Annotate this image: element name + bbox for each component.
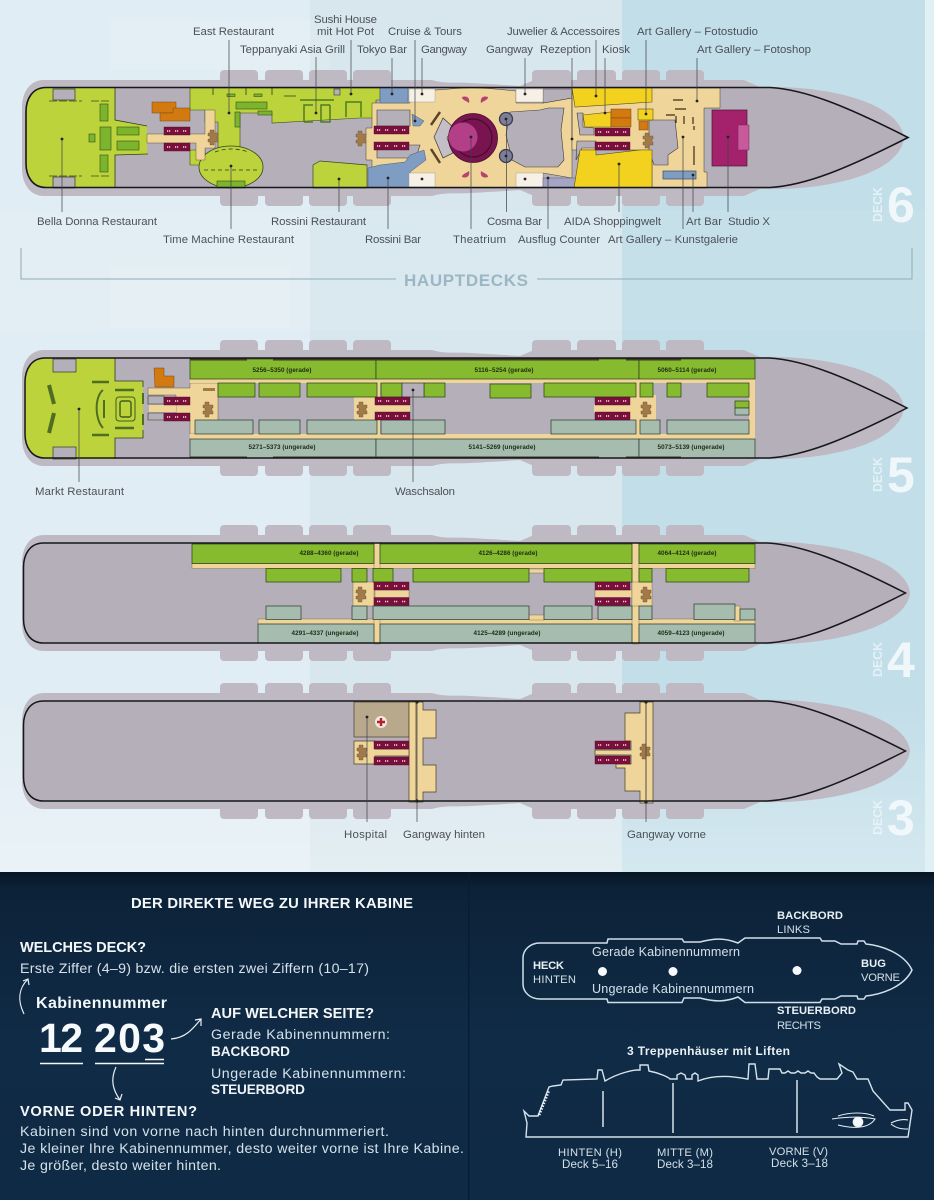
- corridor aft: [147, 110, 215, 160]
- shops yellow: [572, 88, 653, 188]
- hull floor deck 4: [24, 543, 906, 643]
- diagram: ship side view: HINTEN (H): [558, 1147, 622, 1159]
- arrow up to deck text: [20, 979, 29, 1014]
- text block: Vorne oder hinten: Je kleiner Ihre Kabinennummer, desto weiter vorne ist Ihre Kabine.: [20, 1141, 464, 1157]
- cabin number example: [36, 995, 167, 1064]
- page background: [0, 0, 934, 872]
- cabin number example: 12: [39, 1015, 83, 1061]
- odd cabin band bottom deck 4: 4125–4289 (ungerade): [474, 630, 540, 637]
- deck label 5: DECK: [871, 457, 885, 492]
- callout: Art Gallery Kunstgalerie: [608, 136, 738, 246]
- Rossini Restaurant: [313, 161, 367, 188]
- even cabin band top deck 5: [190, 359, 755, 379]
- callout: Sushi House mit Hot Pot: Sushi House: [314, 14, 377, 26]
- callout: Ausflug Counter: [518, 177, 600, 246]
- text block: Auf welcher Seite: [211, 1006, 406, 1097]
- callout: Hospital: Hospital: [344, 829, 387, 841]
- callout: Markt Restaurant: [35, 408, 125, 498]
- callout: Kiosk: Kiosk: [602, 44, 630, 56]
- diagram: ship top view: HINTEN: [533, 974, 576, 986]
- callout: AIDA Shoppingwelt: AIDA Shoppingwelt: [564, 216, 662, 228]
- Hospital room: [354, 702, 409, 737]
- Art Bar: [663, 171, 696, 179]
- hull silhouette shadow deck 5: [22, 340, 904, 476]
- diagram: ship top view: STEUERBORD: [777, 1005, 856, 1017]
- diagram: ship side view: Deck 3–18: [657, 1158, 713, 1171]
- text block: Welches Deck: Erste Ziffer (4–9) bzw. die ersten zwei Ziffern (10–17): [20, 961, 369, 977]
- hull silhouette shadow deck 6: [22, 70, 904, 206]
- inner odd cabins deck 4: [266, 604, 755, 620]
- deck label 4: 4: [887, 632, 915, 688]
- callout: Gangway forward: [486, 44, 533, 180]
- inner odd cabins deck 5: [195, 408, 749, 434]
- callout: East Restaurant: East Restaurant: [193, 26, 275, 38]
- callouts deck 6: [37, 14, 811, 246]
- diagram: ship side view: [524, 1064, 912, 1171]
- inner even cabins deck 5: [218, 383, 749, 408]
- callout: Bella Donna Restaurant: Bella Donna Restaurant: [37, 216, 158, 228]
- text block: Auf welcher Seite: AUF WELCHER SEITE?: [211, 1006, 374, 1022]
- callout: Waschsalon: Waschsalon: [395, 486, 455, 498]
- deck label 3: [871, 790, 915, 846]
- callout: Waschsalon: [395, 389, 455, 498]
- callout: Theatrium: Theatrium: [453, 234, 506, 246]
- text block: Auf welcher Seite: STEUERBORD: [211, 1082, 305, 1097]
- even cabin band top deck 5: 5256–5350 (gerade): [252, 367, 312, 374]
- diagram: ship top view: Gerade Kabinennummern: [592, 945, 740, 959]
- odd cabin band bottom deck 5: 5271–5373 (ungerade): [248, 444, 316, 451]
- panel: navy cabin guide: [0, 872, 934, 1200]
- callout: Time Machine Restaurant: Time Machine Restaurant: [163, 234, 295, 246]
- deck label 6: DECK: [871, 187, 885, 222]
- deck label 4: [871, 632, 915, 688]
- deck label 3: DECK: [871, 800, 885, 835]
- corridors deck 4: [192, 543, 755, 644]
- Markt Restaurant area: [25, 358, 143, 459]
- hull outline deck 4: [24, 543, 906, 643]
- callout: Sushi House mit Hot Pot: [314, 14, 377, 95]
- odd cabin band bottom deck 5: 5141–5269 (ungerade): [468, 444, 536, 451]
- guide title: DER DIREKTE WEG ZU IHRER KABINE: [131, 896, 413, 912]
- callout: Art Gallery Fotostudio: Art Gallery – Fotostudio: [637, 26, 758, 38]
- odd cabin band bottom deck 4: 4291–4337 (ungerade): [292, 630, 358, 637]
- arrow down to position text: [113, 1067, 122, 1100]
- forward beige corridors: [572, 88, 720, 188]
- deck label 3: 3: [887, 790, 915, 846]
- diagram: ship side view: Deck 3–18: [771, 1157, 828, 1170]
- corridors deck 5: [190, 379, 755, 439]
- hull silhouette shadow deck 4: [22, 525, 910, 661]
- callout: Art Gallery Fotoshop: Art Gallery – Fotoshop: [697, 44, 811, 56]
- callout: Rossini Restaurant: [271, 178, 367, 228]
- arrow right to side text: [171, 1019, 201, 1039]
- diagram: ship top view: LINKS: [777, 924, 810, 936]
- callout: Teppanyaki Asia Grill: [240, 44, 345, 114]
- even cabin band top deck 4: [192, 544, 755, 564]
- callout: Gangway vorne: [627, 700, 706, 841]
- hull floor deck 6: [26, 88, 908, 188]
- central atrium floor: [366, 88, 572, 188]
- section heading: Hauptdecks: [21, 248, 912, 290]
- callout: Gangway port aft: [421, 44, 467, 180]
- callout: Studio X: Studio X: [728, 216, 770, 228]
- callout: Tokyo Bar: [357, 44, 407, 95]
- section heading: Hauptdecks: HAUPTDECKS: [404, 271, 528, 290]
- deck label 6: 6: [887, 177, 915, 233]
- callout: Gangway hinten: Gangway hinten: [403, 829, 485, 841]
- hull outline deck 5: [25, 358, 907, 458]
- callout: Art Bar: [686, 174, 722, 228]
- icon: ship eye: [832, 1113, 908, 1129]
- hull outline deck 3: [24, 701, 906, 801]
- diagram: ship top view: HECK: [533, 960, 564, 972]
- atrium service rooms: [377, 89, 572, 167]
- callout: East Restaurant: [193, 26, 275, 114]
- callout: Gangway forward: Gangway: [486, 44, 533, 56]
- diagram: ship side view: VORNE (V): [769, 1146, 828, 1158]
- orange service rooms: [152, 102, 648, 130]
- bars: Tokyo Bar and Rossini Bar: [368, 88, 426, 188]
- odd cabin band bottom deck 5: 5073–5139 (ungerade): [658, 444, 724, 451]
- panel: deck 4 plan: [22, 525, 910, 661]
- callout: Sushi House mit Hot Pot: mit Hot Pot: [317, 26, 375, 38]
- text block: Vorne oder hinten: Kabinen sind von vorne nach hinten durchnummeriert.: [20, 1124, 389, 1140]
- callout: Gangway vorne: Gangway vorne: [627, 829, 706, 841]
- text block: Auf welcher Seite: Ungerade Kabinennummern:: [211, 1066, 406, 1082]
- panel: deck 5 plan: [22, 340, 907, 476]
- Waschsalon room: [402, 383, 424, 397]
- deck label 5: 5: [887, 447, 915, 503]
- callout: Gangway port aft: Gangway: [421, 44, 467, 56]
- deck label 6: [871, 177, 915, 233]
- callout: Rezeption: [540, 44, 591, 140]
- hull outline deck 6: [26, 88, 908, 188]
- callout: Cosma Bar: [487, 118, 542, 228]
- callout: AIDA Shoppingwelt: [564, 163, 662, 228]
- deck label 4: DECK: [871, 642, 885, 677]
- text block: Welches Deck: WELCHES DECK?: [20, 940, 146, 956]
- cabin number example: 203: [94, 1015, 165, 1061]
- diagram: ship top view: Ungerade Kabinennummern: [592, 982, 754, 996]
- odd cabin band bottom deck 4: 4059–4123 (ungerade): [658, 630, 724, 637]
- callout: Bella Donna Restaurant: [37, 138, 158, 228]
- forward restaurants green block: [190, 88, 380, 188]
- callout: Rezeption: Rezeption: [540, 44, 591, 56]
- callout: Markt Restaurant: Markt Restaurant: [35, 486, 125, 498]
- callout: Art Gallery Kunstgalerie: Art Gallery – Kunstgalerie: [608, 234, 738, 246]
- even cabin band top deck 4: 4288–4360 (gerade): [300, 550, 358, 557]
- callout: Cruise & Tours: Cruise & Tours: [388, 26, 462, 38]
- diagram: ship top view: RECHTS: [777, 1020, 821, 1032]
- diagram: ship top view: VORNE: [861, 972, 900, 984]
- restrooms and stairs deck 3: [357, 741, 650, 765]
- callout: Studio X: [727, 136, 770, 228]
- panel: deck 3 plan: [22, 683, 910, 819]
- heading: stairwells: 3 Treppenhäuser mit Liften: [627, 1044, 790, 1058]
- callout: Rossini Bar: Rossini Bar: [365, 234, 421, 246]
- callout: Gangway hinten: [403, 700, 485, 841]
- hull silhouette shadow deck 3: [22, 683, 910, 819]
- hull floor deck 5: [25, 358, 907, 458]
- diagram: ship top view: BACKBORD: [777, 910, 843, 922]
- restrooms and stairs deck 4: [356, 582, 651, 606]
- Ausflug Counter: [543, 178, 585, 188]
- callout: Rossini Bar: [365, 177, 421, 246]
- even cabin band top deck 5: 5116–5254 (gerade): [474, 367, 534, 374]
- callout: Cruise & Tours: [388, 26, 462, 122]
- text block: Vorne oder hinten: Je größer, desto weiter hinten.: [20, 1158, 221, 1174]
- restrooms and stairs deck 6: [164, 126, 653, 151]
- aft service core: [148, 368, 218, 434]
- callout: Rossini Restaurant: Rossini Restaurant: [271, 216, 367, 228]
- callout: Juwelier & Accessoires: Juwelier & Accessoires: [507, 26, 620, 38]
- gangway doors: [409, 89, 543, 187]
- diagram: ship top view: [523, 910, 912, 1032]
- callout: Tokyo Bar: Tokyo Bar: [357, 44, 407, 56]
- text block: Vorne oder hinten: [20, 1104, 464, 1174]
- callout: Theatrium: [453, 136, 506, 246]
- even cabin band top deck 4: 4126–4286 (gerade): [478, 550, 538, 557]
- aft gangway and service core: [354, 702, 436, 802]
- odd cabin band bottom deck 4: [258, 624, 755, 643]
- callout: Art Gallery Fotoshop: [696, 44, 811, 102]
- diagram: ship side view: MITTE (M): [657, 1147, 713, 1159]
- callout: Juwelier & Accessoires: [507, 26, 620, 97]
- forward gangway and service core: [595, 702, 653, 803]
- Studio X: [712, 110, 749, 166]
- aft restaurant area: [26, 88, 148, 188]
- callout: Teppanyaki Asia Grill: Teppanyaki Asia Grill: [240, 44, 345, 56]
- cabin number example: Kabinennummer: [36, 995, 167, 1012]
- text block: Auf welcher Seite: BACKBORD: [211, 1044, 290, 1059]
- callout: Art Bar: Art Bar: [686, 216, 722, 228]
- odd cabin band bottom deck 5: [190, 439, 755, 458]
- restrooms and stairs deck 5: [357, 397, 651, 420]
- diagram: ship side view: Deck 5–16: [562, 1158, 618, 1171]
- even cabin band top deck 4: 4064–4124 (gerade): [658, 550, 716, 557]
- inner even cabins deck 4: [266, 568, 749, 582]
- callout: Art Gallery Fotostudio: [637, 26, 758, 115]
- hull floor deck 3: [24, 701, 906, 801]
- diagram: ship top view: BUG: [861, 958, 886, 970]
- Theatrium: [431, 96, 512, 178]
- text block: Auf welcher Seite: Gerade Kabinennummern:: [211, 1027, 390, 1043]
- text block: Vorne oder hinten: VORNE ODER HINTEN?: [20, 1104, 197, 1120]
- deck label 5: [871, 447, 915, 503]
- even cabin band top deck 5: 5060–5114 (gerade): [658, 367, 716, 374]
- text block: Welches Deck: [20, 940, 369, 977]
- callout: Hospital: [344, 716, 387, 841]
- callout: Time Machine Restaurant: [163, 165, 295, 246]
- callout: Cosma Bar: Cosma Bar: [487, 216, 542, 228]
- panel: deck 6 plan: [22, 70, 908, 206]
- callout: Ausflug Counter: Ausflug Counter: [518, 234, 600, 246]
- callout: Kiosk: [602, 44, 630, 114]
